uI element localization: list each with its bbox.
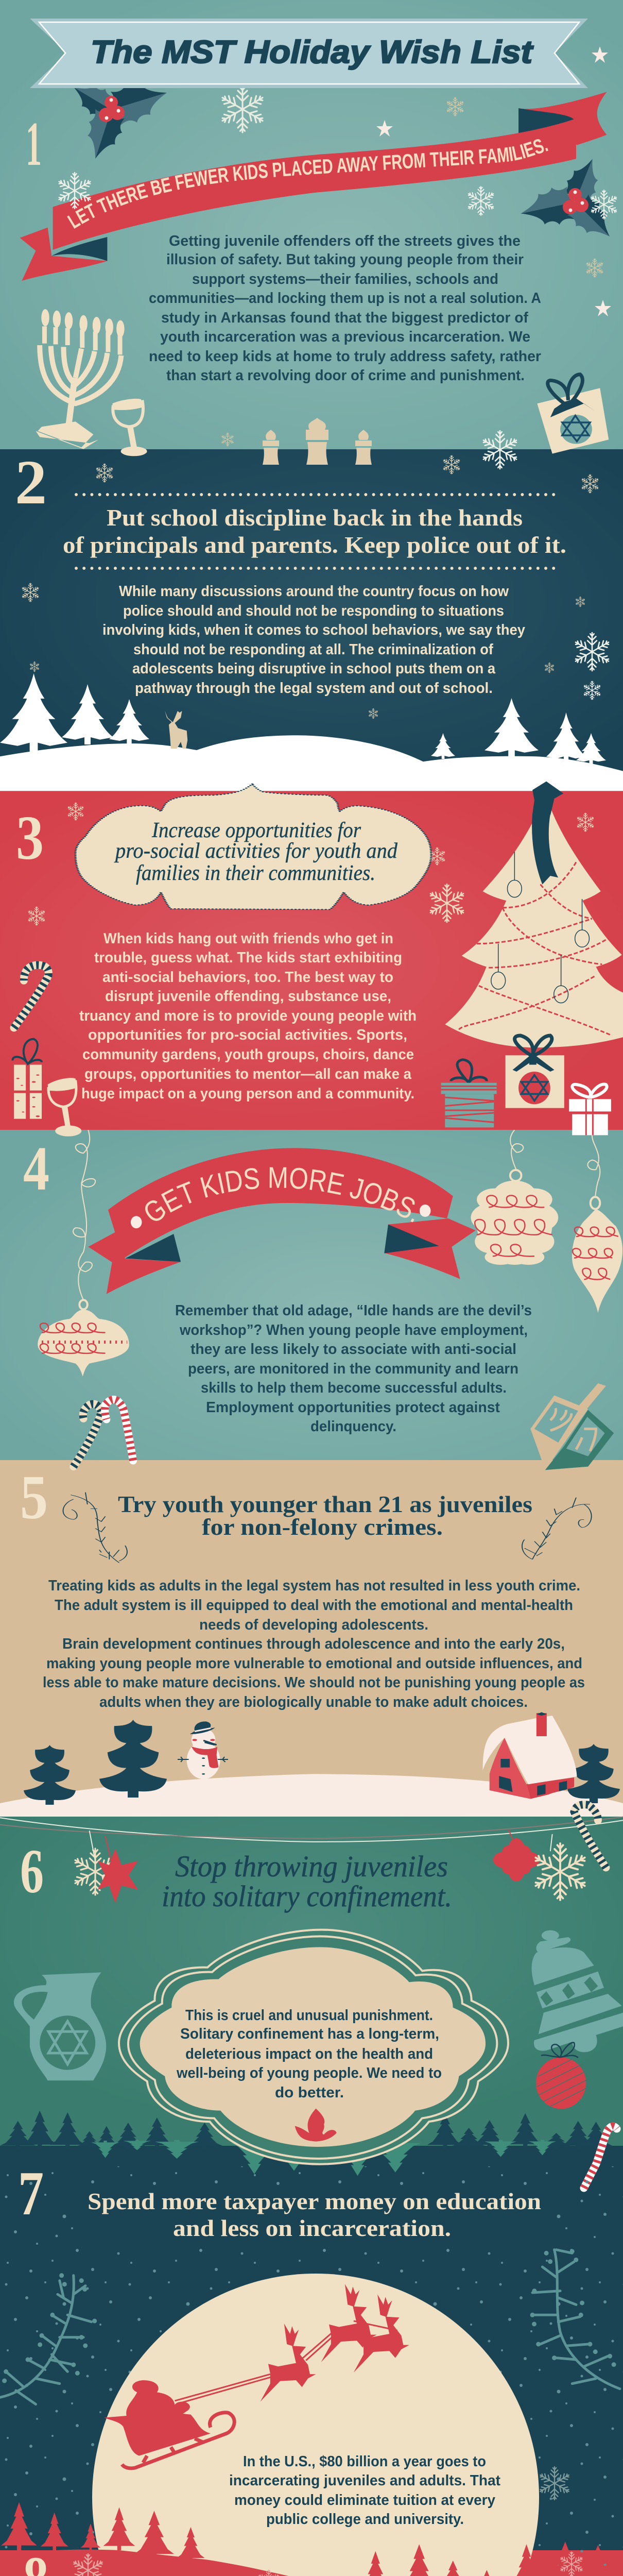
body text 3: community gardens, youth groups, choirs, dance	[82, 1046, 414, 1063]
body text 3: disrupt juvenile offending, substance use,	[105, 988, 391, 1005]
fir trees	[24, 1720, 620, 1805]
branch left	[0, 2276, 95, 2404]
icon: bell	[532, 1930, 623, 2052]
body text 1	[149, 233, 541, 384]
moon	[92, 2274, 539, 2576]
icon: dreidel	[530, 1383, 614, 1470]
icon: menorah	[36, 309, 125, 449]
icon: left gift	[13, 1039, 42, 1119]
heading 2: of principals and parents. Keep police out of it.	[63, 532, 566, 558]
number 5: 5	[20, 1463, 48, 1532]
body text 3: When kids hang out with friends who get in	[103, 930, 393, 947]
hanging ornaments	[73, 1838, 588, 1903]
body text 3: anti-social behaviors, too. The best way to	[102, 969, 393, 986]
section 2: wish two	[0, 431, 623, 791]
icon: wine glass	[112, 399, 147, 456]
body text 6: well-being of young people. We need to	[176, 2065, 442, 2081]
ornament: scalloped	[471, 1181, 558, 1265]
heading 2: Put school discipline back in the hands	[107, 505, 523, 531]
body text 2: police should and should not be responding to situations	[123, 603, 504, 619]
icon: striped gift	[441, 1060, 497, 1127]
body text 6: deleterious impact on the health and	[185, 2046, 433, 2062]
title banner	[30, 19, 588, 88]
thorny branch right	[522, 1498, 592, 1560]
ornament: lower left	[38, 1310, 129, 1377]
icon: santa sleigh	[104, 2380, 234, 2468]
body text 7: In the U.S., $80 billion a year goes to	[243, 2453, 486, 2470]
body text 5: The adult system is ill equipped to deal with the emotional and mental-health	[55, 1597, 573, 1614]
body text 4: they are less likely to associate with anti-social	[191, 1341, 516, 1358]
number 2: 2	[15, 448, 47, 517]
navy tree line	[0, 2111, 614, 2149]
title: The MST Holiday Wish List	[91, 35, 534, 70]
red hills and tree line	[0, 2502, 623, 2576]
icon: pitcher	[14, 1972, 106, 2080]
icon: three gifts	[263, 418, 372, 465]
body text 4: Remember that old adage, “Idle hands are the devil’s	[175, 1302, 532, 1319]
body text 7: money could eliminate tuition at every	[234, 2492, 495, 2509]
heading 3: Increase opportunities for	[151, 819, 361, 842]
icon: candy cane	[574, 1805, 606, 1868]
heading 6	[162, 1850, 452, 1913]
icon: red ball ornament	[536, 2043, 587, 2109]
body text 2: should not be responding at all. The criminalization of	[133, 641, 493, 658]
body text 1: support systems—their families, schools and	[192, 271, 498, 287]
heading 6: into solitary confinement.	[162, 1879, 452, 1913]
body text 1: Getting juvenile offenders off the streets gives the	[169, 233, 521, 249]
icon: holly right	[517, 153, 621, 248]
heading 5: Try youth younger than 21 as juveniles	[118, 1492, 532, 1517]
body text 2: adolescents being disruptive in school puts them on a	[132, 660, 496, 677]
section 1: wish one	[20, 19, 617, 465]
scalloped heading panel	[76, 784, 431, 909]
heading 7: and less on incarceration.	[173, 2215, 451, 2241]
icon: two candy canes	[74, 1399, 133, 1467]
body text 2: pathway through the legal system and out of school.	[135, 680, 493, 697]
icon: deer	[165, 711, 187, 749]
icon: gift with star	[537, 375, 609, 454]
heading 3: pro-social activities for youth and	[114, 839, 398, 863]
snowy hill	[0, 1774, 623, 1817]
icon: christmas tree	[445, 782, 623, 1047]
ornament: teardrop	[572, 1209, 622, 1313]
ornament strings	[73, 1130, 600, 1309]
heading 3	[114, 819, 398, 885]
body text 1: communities—and locking them up is not a real solution. A	[149, 290, 541, 307]
body text 1: youth incarceration was a previous incarceration. We	[160, 329, 530, 345]
icon: reindeer	[175, 2284, 409, 2403]
section 6: wish six	[0, 1805, 623, 2188]
number 7: 7	[18, 2159, 44, 2228]
body text 1: study in Arkansas found that the biggest predictor of	[161, 310, 528, 326]
body text 6: Solitary confinement has a long-term,	[180, 2026, 439, 2042]
body text 2	[102, 583, 525, 697]
falling snow dots	[0, 2166, 623, 2566]
icon: white gift	[569, 1084, 611, 1135]
icon: candy cane	[14, 965, 48, 1028]
body text 3: opportunities for pro-social activities. Sports,	[88, 1027, 407, 1043]
decorative snowflakes and stars	[220, 46, 611, 446]
body text 3: trouble, guess what. The kids start exhibiting	[94, 950, 402, 966]
branch right	[532, 2250, 620, 2389]
inverted green tree line	[91, 2140, 556, 2176]
number 4: 4	[23, 1134, 49, 1204]
section 7: wish seven	[0, 2159, 623, 2576]
icon: red holly leaves	[295, 2109, 337, 2142]
red ribbon banner	[20, 92, 607, 281]
icon: snowy house	[483, 1712, 577, 1799]
icon: cream gift with star	[506, 1036, 564, 1108]
body text 5: Treating kids as adults in the legal system has not resulted in less youth crime.	[48, 1578, 580, 1594]
heading 5	[118, 1492, 532, 1540]
body text 4: skills to help them become successful adults.	[201, 1380, 507, 1396]
icon: wine glass red	[48, 1078, 81, 1137]
body text 1: need to keep kids at home to truly address safety, rather	[149, 348, 541, 365]
number 1: 1	[26, 109, 42, 179]
ribbon text: LET THERE BE FEWER KIDS PLACED AWAY FROM THEIR FAMILIES.	[67, 139, 548, 229]
icon: holly top left	[66, 74, 172, 164]
body text 5: Brain development continues through adolescence and into the early 20s,	[62, 1636, 565, 1652]
body text 5: less able to make mature decisions. We should not be punishing young people as	[43, 1674, 585, 1691]
body text 3: huge impact on a young person and a community.	[81, 1086, 414, 1102]
body text 5: adults when they are biologically unable to make adult choices.	[99, 1694, 528, 1710]
body text 7: public college and university.	[266, 2511, 464, 2528]
body text 3	[79, 930, 417, 1102]
body text 1: than start a revolving door of crime and punishment.	[166, 367, 525, 384]
garland strings	[0, 1817, 623, 1861]
body text 4: workshop”? When young people have employment,	[179, 1322, 528, 1338]
body text 5	[43, 1578, 585, 1710]
heading 5: for non-felony crimes.	[202, 1514, 443, 1540]
snowflakes	[18, 2552, 620, 2576]
body text 4: peers, are monitored in the community and learn	[188, 1361, 518, 1377]
body text 4: delinquency.	[310, 1418, 396, 1435]
body text 4	[175, 1302, 532, 1435]
body text 3: groups, opportunities to mentor—all can make a	[84, 1066, 412, 1082]
snowflakes	[21, 431, 611, 719]
body text 5: needs of developing adolescents.	[199, 1617, 428, 1633]
winter scene: trees and snow hills	[0, 673, 623, 791]
body text 2: involving kids, when it comes to school behaviors, we say they	[102, 622, 525, 638]
heading 2	[63, 505, 566, 558]
icon: red candy cane	[584, 2126, 617, 2188]
body text 7: incarcerating juveniles and adults. That	[229, 2472, 500, 2489]
ribbon text: GET KIDS MORE JOBS.	[145, 1167, 415, 1222]
body text 6: do better.	[275, 2084, 344, 2101]
section 3: wish three	[13, 782, 623, 1137]
quatrefoil panel	[119, 1930, 509, 2164]
ribbon: get kids more jobs	[89, 1148, 476, 1294]
thorny branch left	[63, 1493, 127, 1563]
section 8: wish eight	[18, 2544, 623, 2576]
snowflakes over ribbon	[57, 173, 618, 219]
heading 7	[88, 2189, 541, 2241]
heading 6: Stop throwing juveniles	[175, 1850, 448, 1883]
heading 7: Spend more taxpayer money on education	[88, 2189, 541, 2214]
section 4: wish four	[23, 1129, 623, 1470]
heading 3: families in their communities.	[136, 861, 375, 885]
section 5: wish five	[0, 1463, 623, 1817]
body text 1: illusion of safety. But taking young people from their	[166, 251, 524, 268]
body text 6	[176, 2007, 442, 2101]
body text 4: Employment opportunities protect against	[206, 1399, 500, 1416]
body text 6: This is cruel and unusual punishment.	[185, 2007, 433, 2024]
number 3: 3	[16, 803, 44, 873]
number 6: 6	[20, 1837, 44, 1906]
icon: snowman	[178, 1721, 228, 1779]
body text 5: making young people more vulnerable to emotional and outside influences, and	[46, 1655, 582, 1672]
body text 3: truancy and more is to provide young people with	[79, 1008, 417, 1024]
body text 7	[229, 2453, 500, 2528]
body text 2: While many discussions around the country focus on how	[119, 583, 509, 600]
snowflakes	[27, 803, 595, 925]
